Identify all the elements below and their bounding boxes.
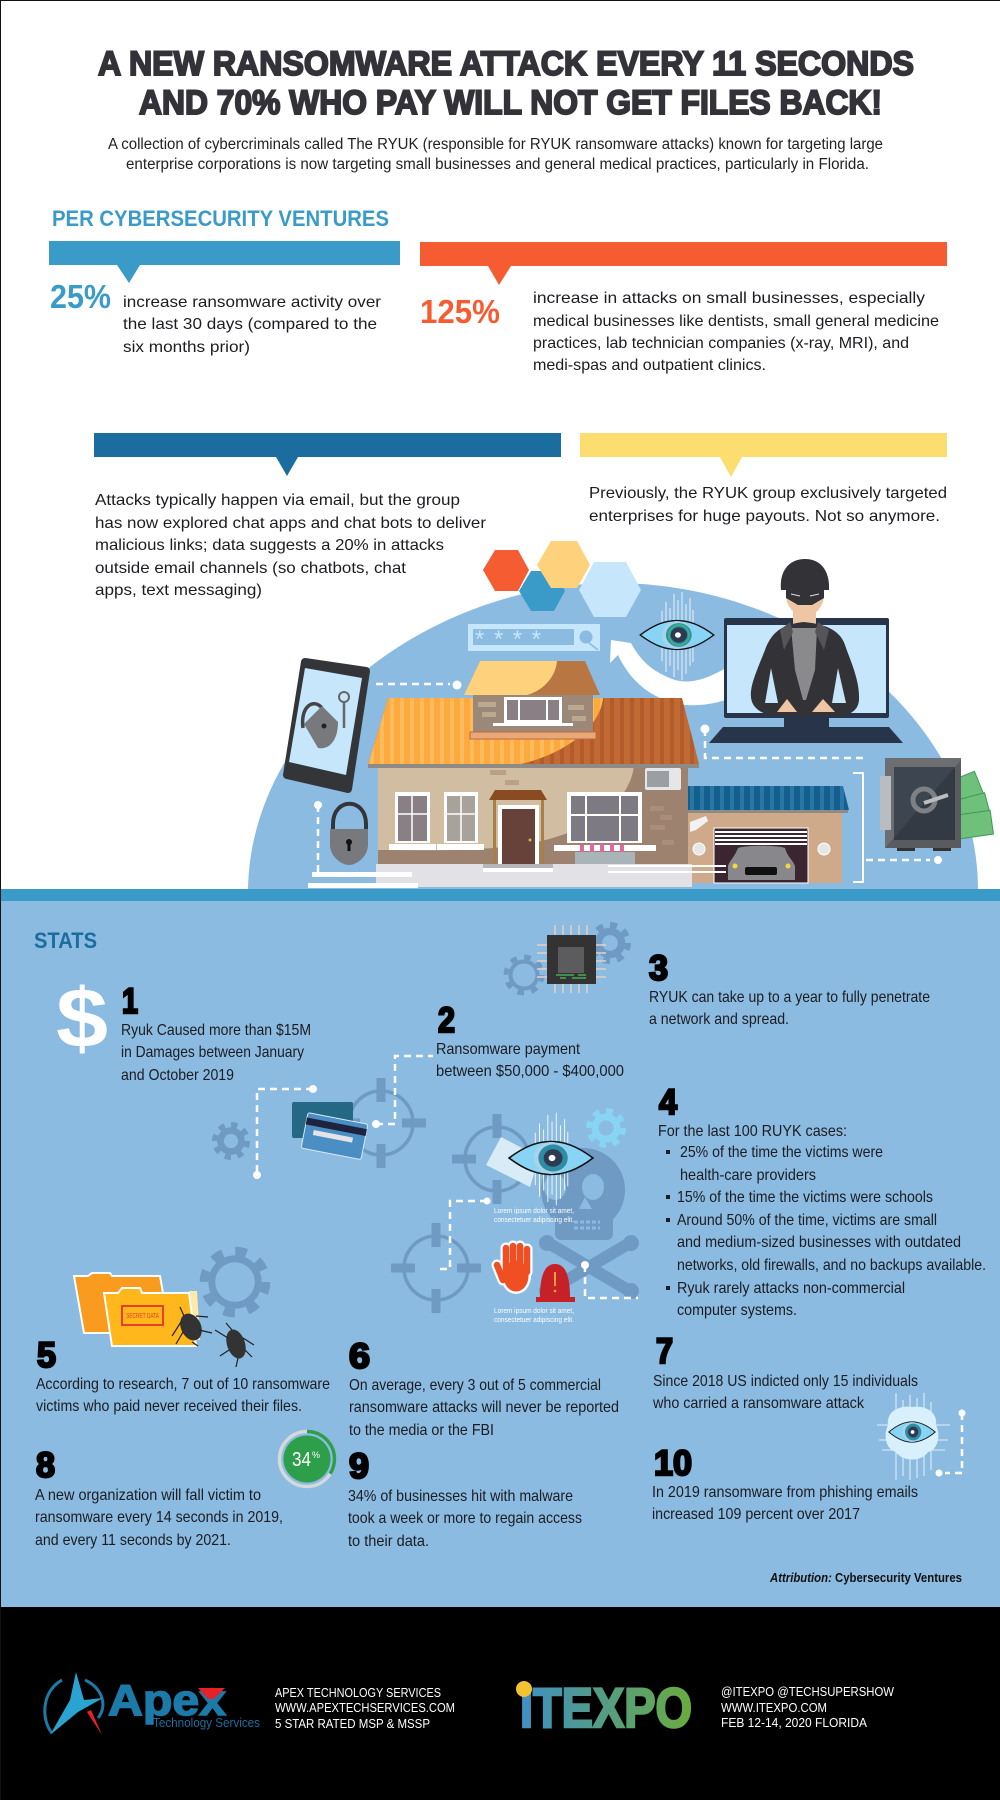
icon: folders with bugs <box>74 1273 254 1367</box>
stat 3 text: RYUK can take up to a year to fully penetrate <box>649 989 930 1006</box>
attack channels text: malicious links; data suggests a 20% in attacks <box>95 537 444 554</box>
attack channels text: apps, text messaging) <box>95 582 262 599</box>
stat 4 text: Around 50% of the time, victims are small <box>677 1212 937 1229</box>
panel: 125 percent <box>420 242 947 374</box>
stat 6 text <box>349 1377 619 1439</box>
apex contact: WWW.APEXTECHSERVICES.COM <box>275 1700 455 1715</box>
stat 25%: 25% <box>50 278 111 315</box>
connector: crossbones <box>581 1261 638 1298</box>
attack channels text: Attacks typically happen via email, but the group <box>95 492 460 509</box>
connector dashes <box>314 680 942 882</box>
icon: hero eye <box>640 592 714 680</box>
stat 6 text: to the media or the FBI <box>349 1422 494 1439</box>
stat 4 text <box>658 1123 986 1319</box>
main wall <box>378 764 688 865</box>
intro paragraph: enterprise corporations is now targeting small businesses and general medical practices, particularly in Florida. <box>126 156 869 173</box>
stat 9 text <box>348 1488 582 1550</box>
stat 6 <box>349 1337 619 1439</box>
stat 5 text: victims who paid never received their files. <box>36 1398 302 1415</box>
stat 3 <box>649 949 930 1028</box>
main roof <box>368 698 699 764</box>
stat description <box>123 294 382 356</box>
number 4: 4 <box>659 1083 677 1122</box>
panel: 25 percent <box>49 241 400 356</box>
stat 7 <box>652 1332 918 1412</box>
icon: gears around chip <box>506 925 628 993</box>
stat 2 text <box>436 1041 624 1080</box>
itexpo contact: @ITEXPO @TECHSUPERSHOW <box>721 1684 895 1699</box>
stat 2 <box>436 1001 624 1080</box>
monitor <box>709 618 903 743</box>
stat 10 text <box>652 1484 918 1523</box>
chart: 34 percent donut <box>280 1432 334 1486</box>
attack channels text: has now explored chat apps and chat bots to deliver <box>95 515 487 532</box>
icon: padlock <box>330 804 368 865</box>
intro paragraph <box>108 136 883 173</box>
icon: crosshair 2 <box>452 1114 542 1204</box>
number 3: 3 <box>649 949 668 988</box>
intro paragraph: A collection of cybercriminals called The RYUK (responsible for RYUK ransomware attacks) known for targeting large <box>108 136 883 153</box>
icon: large gear <box>204 1251 266 1313</box>
stat 4 <box>658 1083 986 1319</box>
stat description: the last 30 days (compared to the <box>123 316 377 333</box>
heading: stats: STATS <box>34 928 97 953</box>
stat description: medical businesses like dentists, small general medicine <box>533 313 939 330</box>
itexpo contact <box>721 1684 895 1730</box>
hero dome <box>248 583 978 890</box>
attribution: Attribution: Cybersecurity Ventures <box>769 1570 962 1585</box>
stat 7 text: who carried a ransomware attack <box>652 1395 865 1412</box>
apex tagline: Technology Services <box>153 1715 260 1730</box>
previous targets text: enterprises for huge payouts. Not so anymore. <box>589 508 940 525</box>
garage door with car <box>714 828 808 883</box>
stat 1 text: Ryuk Caused more than $15M <box>121 1022 311 1039</box>
caption placeholder 1 <box>494 1208 574 1224</box>
logo: apex <box>45 1672 260 1735</box>
chart: 34 percent donut: % <box>312 1450 320 1460</box>
illustration: house <box>368 661 849 887</box>
stat 5 text: According to research, 7 out of 10 ransomware <box>36 1376 330 1393</box>
icon: monitor with hacker <box>709 559 903 743</box>
caption placeholder 1: Lorem ipsum dolor sit amet, <box>494 1208 574 1215</box>
ground <box>376 864 726 887</box>
icon: stop hand <box>497 1246 531 1294</box>
caption placeholder 2: consectetuer adipiscing elit. <box>494 1317 574 1324</box>
stat 6 text: On average, every 3 out of 5 commercial <box>349 1377 601 1394</box>
stat description: increase ransomware activity over <box>123 294 382 311</box>
number 7: 7 <box>656 1332 673 1371</box>
icon: password box: **** <box>475 626 541 653</box>
red accent <box>198 1688 225 1699</box>
garage wall <box>688 813 842 883</box>
caption placeholder 2 <box>494 1308 574 1324</box>
icon: gear left <box>215 1125 247 1157</box>
orange banner <box>420 242 947 285</box>
stat 10 text: In 2019 ransomware from phishing emails <box>652 1484 918 1501</box>
number 6: 6 <box>349 1337 370 1376</box>
stat 10 <box>652 1444 918 1523</box>
heading: per cybersecurity ventures: PER CYBERSECURITY VENTURES <box>52 206 389 231</box>
stat 8 text <box>35 1487 283 1549</box>
attack channels text <box>95 492 487 599</box>
blue divider band <box>0 889 1000 901</box>
stat 3 text: a network and spread. <box>649 1011 789 1028</box>
number 9: 9 <box>349 1447 369 1486</box>
title: AND 70% WHO PAY WILL NOT GET FILES BACK! <box>139 84 882 122</box>
chart: 34 percent donut: 34 <box>292 1449 311 1471</box>
stat 9 <box>348 1447 582 1550</box>
stat 4 text: health-care providers <box>680 1167 816 1184</box>
number 2: 2 <box>438 1001 455 1040</box>
connector: crosshair to stat 2 <box>372 1056 433 1128</box>
icon: eye with circuit <box>509 1113 593 1205</box>
title <box>98 45 914 122</box>
stat 4 text: 15% of the time the victims were schools <box>677 1189 933 1206</box>
stat 4 text: For the last 100 RUYK cases: <box>658 1123 847 1140</box>
itexpo contact: WWW.ITEXPO.COM <box>721 1700 827 1715</box>
panel: previously enterprises <box>580 433 947 525</box>
apex contact: APEX TECHNOLOGY SERVICES <box>275 1685 441 1700</box>
itexpo contact: FEB 12-14, 2020 FLORIDA <box>721 1715 867 1730</box>
icon: safe with money <box>880 758 993 851</box>
blue banner <box>49 241 400 283</box>
icon: phone with unlocked padlock <box>287 662 366 789</box>
stat 125%: 125% <box>420 293 500 330</box>
previous targets text: Previously, the RYUK group exclusively targeted <box>589 485 947 502</box>
stat description: medi-spas and outpatient clinics. <box>533 357 766 374</box>
bug 1 <box>172 1307 212 1346</box>
icon: password box <box>468 624 600 653</box>
caption placeholder 2: Lorem ipsum dolor sit amet, <box>494 1308 574 1315</box>
stat 4 text: and medium-sized businesses with outdated <box>677 1234 961 1251</box>
icon: dollar sign: $ <box>56 971 108 1065</box>
apex contact: 5 STAR RATED MSP & MSSP <box>275 1716 430 1731</box>
apex emblem <box>45 1672 103 1735</box>
money <box>947 771 993 840</box>
icon: envelope <box>486 1137 539 1187</box>
number 10: 10 <box>654 1444 692 1483</box>
attack channels text: outside email channels (so chatbots, chat <box>95 560 407 577</box>
stat 4 text: computer systems. <box>677 1302 797 1319</box>
stat 5 <box>36 1336 330 1415</box>
stat 7 text <box>652 1373 918 1412</box>
stat 1 <box>121 982 311 1084</box>
icon: skull and crossbones <box>539 1148 639 1299</box>
stat 8 text: and every 11 seconds by 2021. <box>35 1532 231 1549</box>
arrow <box>610 640 726 705</box>
stat 6 text: ransomware attacks will never be reported <box>349 1399 619 1416</box>
connector: card to gear <box>253 1085 317 1179</box>
security camera <box>690 816 708 832</box>
previous targets text <box>589 485 947 525</box>
white path stripes <box>308 872 418 888</box>
logo: itexpo: ITEXPO <box>520 1676 692 1739</box>
stat 9 text: to their data. <box>348 1533 429 1550</box>
number 1: 1 <box>122 982 138 1021</box>
caption placeholder 1: consectetuer adipiscing elit. <box>494 1217 574 1224</box>
icon: hexagons <box>483 541 641 617</box>
icon: crosshair 3 <box>391 1223 481 1313</box>
title: A NEW RANSOMWARE ATTACK EVERY 11 SECONDS <box>98 45 914 83</box>
icon: credit cards <box>292 1102 368 1160</box>
number 5: 5 <box>37 1336 56 1375</box>
stat 2 text: between $50,000 - $400,000 <box>436 1063 624 1080</box>
dormer roof <box>464 661 600 695</box>
stat 3 text <box>649 989 930 1028</box>
stat 4 text: 25% of the time the victims were <box>680 1144 883 1161</box>
apex wordmark: Apex <box>108 1676 227 1725</box>
panel: attack channels <box>94 433 561 599</box>
door <box>489 790 547 864</box>
stat 9 text: 34% of businesses hit with malware <box>348 1488 573 1505</box>
air conditioner <box>645 768 681 790</box>
stat 8 <box>35 1446 283 1549</box>
connector: eye to crosshair <box>438 1198 490 1269</box>
icon: circuit head with eye <box>877 1393 950 1480</box>
apex contact <box>275 1685 455 1731</box>
icon: crosshair 1 <box>336 1078 426 1168</box>
stat 7 text: Since 2018 US indicted only 15 individuals <box>653 1373 918 1390</box>
stat 5 text <box>36 1376 330 1415</box>
stat 1 text: in Damages between January <box>121 1044 304 1061</box>
stamp text: SECRET DATA <box>126 1313 159 1320</box>
stat 9 text: took a week or more to regain access <box>348 1510 582 1527</box>
yellow banner <box>580 433 947 477</box>
stat 1 text: and October 2019 <box>121 1067 234 1084</box>
stat description <box>533 290 939 374</box>
bullets <box>666 1150 670 1290</box>
icon: alarm <box>536 1264 575 1302</box>
stat 8 text: ransomware every 14 seconds in 2019, <box>35 1509 283 1526</box>
dormer window <box>504 697 562 723</box>
connector: circuit head <box>936 1410 966 1476</box>
ground floor windows <box>389 792 656 851</box>
hacker <box>751 559 859 716</box>
dormer wall <box>473 695 593 732</box>
flower box <box>575 843 635 864</box>
stat 8 text: A new organization will fall victim to <box>35 1487 261 1504</box>
icon: light blue gear <box>589 1111 623 1145</box>
stat 4 text: Ryuk rarely attacks non-commercial <box>677 1280 905 1297</box>
tmc badge <box>516 1681 532 1697</box>
dark blue banner <box>94 433 561 476</box>
stat description: increase in attacks on small businesses, especially <box>533 290 925 307</box>
stat description: six months prior) <box>123 339 250 356</box>
icon: cpu chip <box>537 925 606 993</box>
garage portholes <box>693 843 830 855</box>
footer <box>0 1607 1000 1800</box>
garage roof <box>688 786 849 810</box>
number 8: 8 <box>36 1446 55 1485</box>
stat 1 text <box>121 1022 311 1084</box>
stat 2 text: Ransomware payment <box>436 1041 580 1058</box>
stat 10 text: increased 109 percent over 2017 <box>652 1506 860 1523</box>
bug 2 <box>215 1323 254 1367</box>
stats background <box>0 901 1000 1607</box>
stat description: practices, lab technician companies (x-ray, MRI), and <box>533 335 909 352</box>
